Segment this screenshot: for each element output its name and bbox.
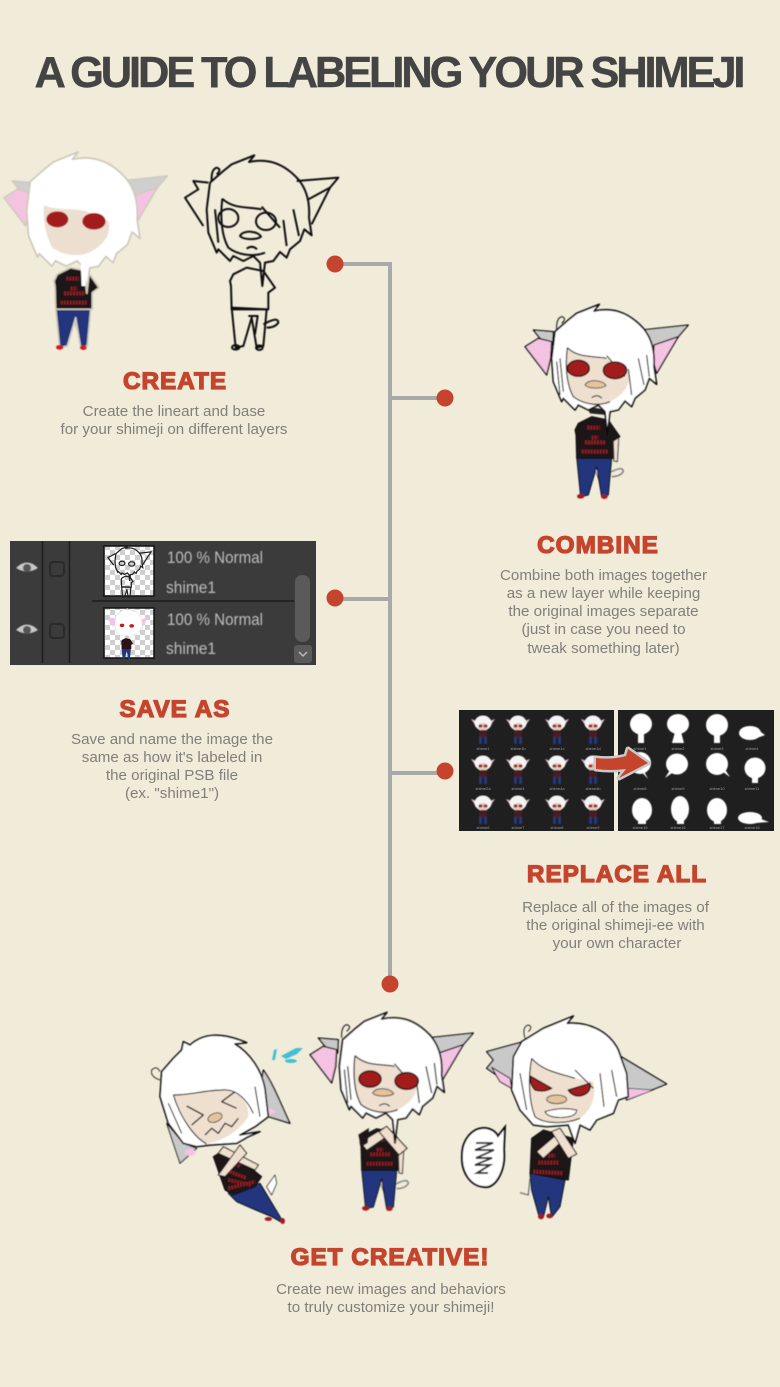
icon: scribble speech bubble <box>462 1127 505 1187</box>
icon: visibility eyes <box>16 562 38 634</box>
sprite sheet: blank shimeji-ee: shime17 <box>709 825 725 830</box>
sprite sheet: blank shimeji-ee: shime9 <box>672 786 685 791</box>
text: save as description: Save and name the image the <box>71 731 273 748</box>
layer labels: shime1 <box>166 639 216 658</box>
sprite sheet: blank shimeji-ee: shime11 <box>745 786 760 791</box>
text: get creative description: to truly customize your shimeji! <box>288 1299 494 1316</box>
sprite sheet: blank shimeji-ee: shime10 <box>709 786 725 791</box>
timeline connector <box>326 256 454 992</box>
sprite sheet: original shimeji: shime9 <box>587 825 600 830</box>
illustration: lineart character <box>185 155 338 350</box>
text: create description: Create the lineart and base <box>83 403 265 420</box>
text: save as description: same as how it's labeled in <box>82 749 262 766</box>
sprite sheet: original shimeji: shime6 <box>477 825 490 830</box>
layer labels: 100 % Normal <box>167 548 263 567</box>
illustration: combined character <box>525 304 688 499</box>
sprite sheet: original shimeji: shime1c <box>550 746 564 751</box>
sprite sheet: original shimeji: shime7 <box>512 825 525 830</box>
scrollbar <box>294 575 312 663</box>
sprite sheet: original shimeji: shime4 <box>512 786 525 791</box>
sprite sheet: original shimeji: shime4b <box>585 786 601 791</box>
sprite sheet: original shimeji: shime1d <box>585 746 601 751</box>
sprite sheet: blank shimeji-ee: shime4 <box>746 746 759 751</box>
text: save as description: (ex. "shime1") <box>125 785 219 802</box>
sprite sheet: blank shimeji-ee: shime16 <box>670 825 686 830</box>
text: combine description: tweak something later) <box>527 640 680 657</box>
layer thumbnails <box>104 546 154 659</box>
character: angry pose <box>487 1016 667 1219</box>
text: combine description: the original images separate <box>508 603 699 620</box>
layer checkboxes <box>50 562 64 638</box>
heading: combine: COMBINE <box>537 532 659 559</box>
layer labels: shime1 <box>166 578 216 597</box>
sprite sheet: blank shimeji-ee: shime2 <box>672 746 685 751</box>
heading: get creative: GET CREATIVE! <box>291 1244 489 1271</box>
sprite sheet: original shimeji: shime4a <box>549 786 565 791</box>
layer labels: 100 % Normal <box>167 610 263 629</box>
text: combine description: Combine both images together <box>500 567 707 584</box>
illustration: three character poses <box>151 1012 667 1224</box>
layer labels <box>166 548 263 658</box>
text: replace all description: the original shimeji-ee with <box>526 917 705 934</box>
heading: create: CREATE <box>123 368 227 395</box>
text: replace all description: Replace all of the images of <box>522 899 710 916</box>
icon: sweat drops <box>272 1048 303 1063</box>
sprite sheet: original shimeji <box>459 710 614 831</box>
arrow: replace <box>596 749 648 778</box>
sprite sheet: blank shimeji-ee: shime15 <box>632 825 648 830</box>
sprite sheet: blank shimeji-ee: shime3 <box>711 746 724 751</box>
title: A GUIDE TO LABELING YOUR SHIMEJI <box>34 49 746 97</box>
text: create description: for your shimeji on different layers <box>61 421 288 438</box>
character: flustered pose <box>151 1035 290 1224</box>
heading: replace all: REPLACE ALL <box>527 861 707 888</box>
sprite sheet: blank shimeji-ee: shime1 <box>634 746 647 751</box>
sprite sheet: blank shimeji-ee: shime18 <box>744 825 760 830</box>
text: replace all description: your own character <box>553 935 681 952</box>
illustration: flat colour base character <box>4 152 167 350</box>
sprite sheet: blank shimeji-ee: shime8 <box>634 786 647 791</box>
heading: save as: SAVE AS <box>120 696 230 723</box>
text: save as description: the original PSB file <box>106 767 238 784</box>
sprite sheet: original shimeji: shime8 <box>551 825 564 830</box>
text: combine description: as a new layer while keeping <box>507 585 700 602</box>
sprite sheet: original shimeji: shime1b <box>510 746 526 751</box>
character: worried pose <box>310 1012 473 1211</box>
text: combine description: (just in case you need to <box>521 621 686 638</box>
sprite sheet: original shimeji: shime2a <box>475 786 491 791</box>
layers panel screenshot <box>10 541 316 665</box>
text: get creative description: Create new images and behaviors <box>276 1281 506 1298</box>
sprite sheet: blank shimeji-ee <box>618 710 774 831</box>
sprite sheet: original shimeji: shime1 <box>477 746 490 751</box>
